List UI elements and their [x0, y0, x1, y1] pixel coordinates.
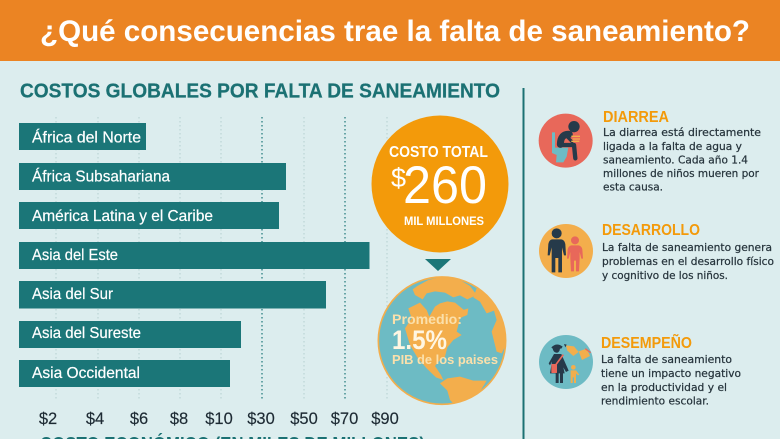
globe: average GDP	[378, 277, 508, 407]
globe: average GDP: PIB de los paises	[392, 353, 498, 367]
text block: desempeño: La falta de saneamiento	[601, 354, 732, 366]
x axis labels: $6	[130, 410, 148, 428]
bar: Asia Occidental: Asia Occidental	[32, 365, 140, 382]
text block: desempeño	[601, 354, 741, 408]
x axis labels: $30	[247, 410, 275, 428]
bar: América Latina y el Caribe	[19, 202, 279, 229]
callout: total cost circle: MIL MILLONES	[404, 214, 484, 228]
panel divider	[522, 88, 524, 439]
text block: desempeño: en la productividad y el	[601, 382, 727, 394]
bar: África Subsahariana	[19, 163, 286, 190]
text block: diarrea	[603, 127, 761, 194]
icon: person on toilet	[539, 114, 593, 168]
bar: América Latina y el Caribe: América Latina y el Caribe	[32, 208, 213, 225]
panel: desempeño	[539, 334, 741, 408]
heading: desarrollo: DESARROLLO	[602, 222, 700, 239]
bar: África del Norte	[19, 123, 146, 150]
text block: diarrea: saneamiento. Cada año 1.4	[603, 154, 748, 166]
x axis labels	[39, 410, 399, 428]
text block: desarrollo: y cognitivo de los niños.	[602, 270, 728, 282]
x axis labels: $10	[205, 410, 233, 428]
icon: adult and child	[539, 224, 593, 278]
panel: diarrea	[539, 109, 761, 194]
icon: mother, child and school supplies	[539, 335, 593, 389]
bar: Asia del Sur	[19, 281, 326, 308]
text block: diarrea: esta causa.	[603, 182, 663, 194]
globe: average GDP: 1.5%	[392, 325, 447, 355]
bar: Asia del Este: Asia del Este	[32, 247, 118, 264]
text block: desarrollo: La falta de saneamiento genera	[602, 242, 772, 254]
text block: diarrea: ligada a la falta de agua y	[603, 141, 742, 153]
x axis labels: $70	[331, 410, 358, 428]
chart heading: COSTOS GLOBALES POR FALTA DE SANEAMIENTO	[20, 80, 500, 102]
callout: total cost circle: COSTO TOTAL	[389, 144, 488, 161]
text block: desarrollo	[602, 242, 774, 282]
heading: diarrea: DIARREA	[603, 109, 669, 126]
text block: diarrea: La diarrea está directamente	[603, 127, 761, 139]
title: ¿Qué consecuencias trae la falta de saneamiento?	[40, 15, 750, 48]
text block: desempeño: tiene un impacto negativo	[601, 368, 741, 380]
arrow: down triangle	[425, 259, 451, 271]
callout: total cost circle: 260	[403, 156, 487, 215]
bar: Asia del Sureste	[19, 321, 241, 348]
bar: África Subsahariana: África Subsahariana	[32, 166, 170, 186]
x axis labels: $2	[39, 410, 57, 428]
x axis labels: $8	[170, 410, 188, 428]
x axis labels: $90	[371, 410, 399, 428]
bar: Asia del Este	[19, 242, 370, 269]
x axis labels: $50	[290, 410, 318, 428]
header banner	[0, 0, 780, 61]
callout: total cost circle: $	[391, 163, 406, 193]
globe: average GDP: Promedio:	[392, 312, 462, 327]
bar: Asia del Sur: Asia del Sur	[32, 286, 114, 303]
panel: desarrollo	[539, 222, 774, 282]
bar: África del Norte: África del Norte	[32, 128, 141, 146]
bar chart: costs by region	[19, 117, 399, 428]
heading: desempeño: DESEMPEÑO	[601, 334, 692, 352]
x axis labels: $4	[86, 410, 104, 428]
bar: Asia Occidental	[19, 360, 230, 387]
text block: desempeño: rendimiento escolar.	[601, 396, 709, 408]
bar: Asia del Sureste: Asia del Sureste	[32, 325, 141, 342]
text block: desarrollo: problemas en el desarrollo físico	[602, 256, 774, 268]
callout: total cost circle	[372, 116, 508, 252]
text block: diarrea: millones de niños mueren por	[603, 168, 760, 180]
